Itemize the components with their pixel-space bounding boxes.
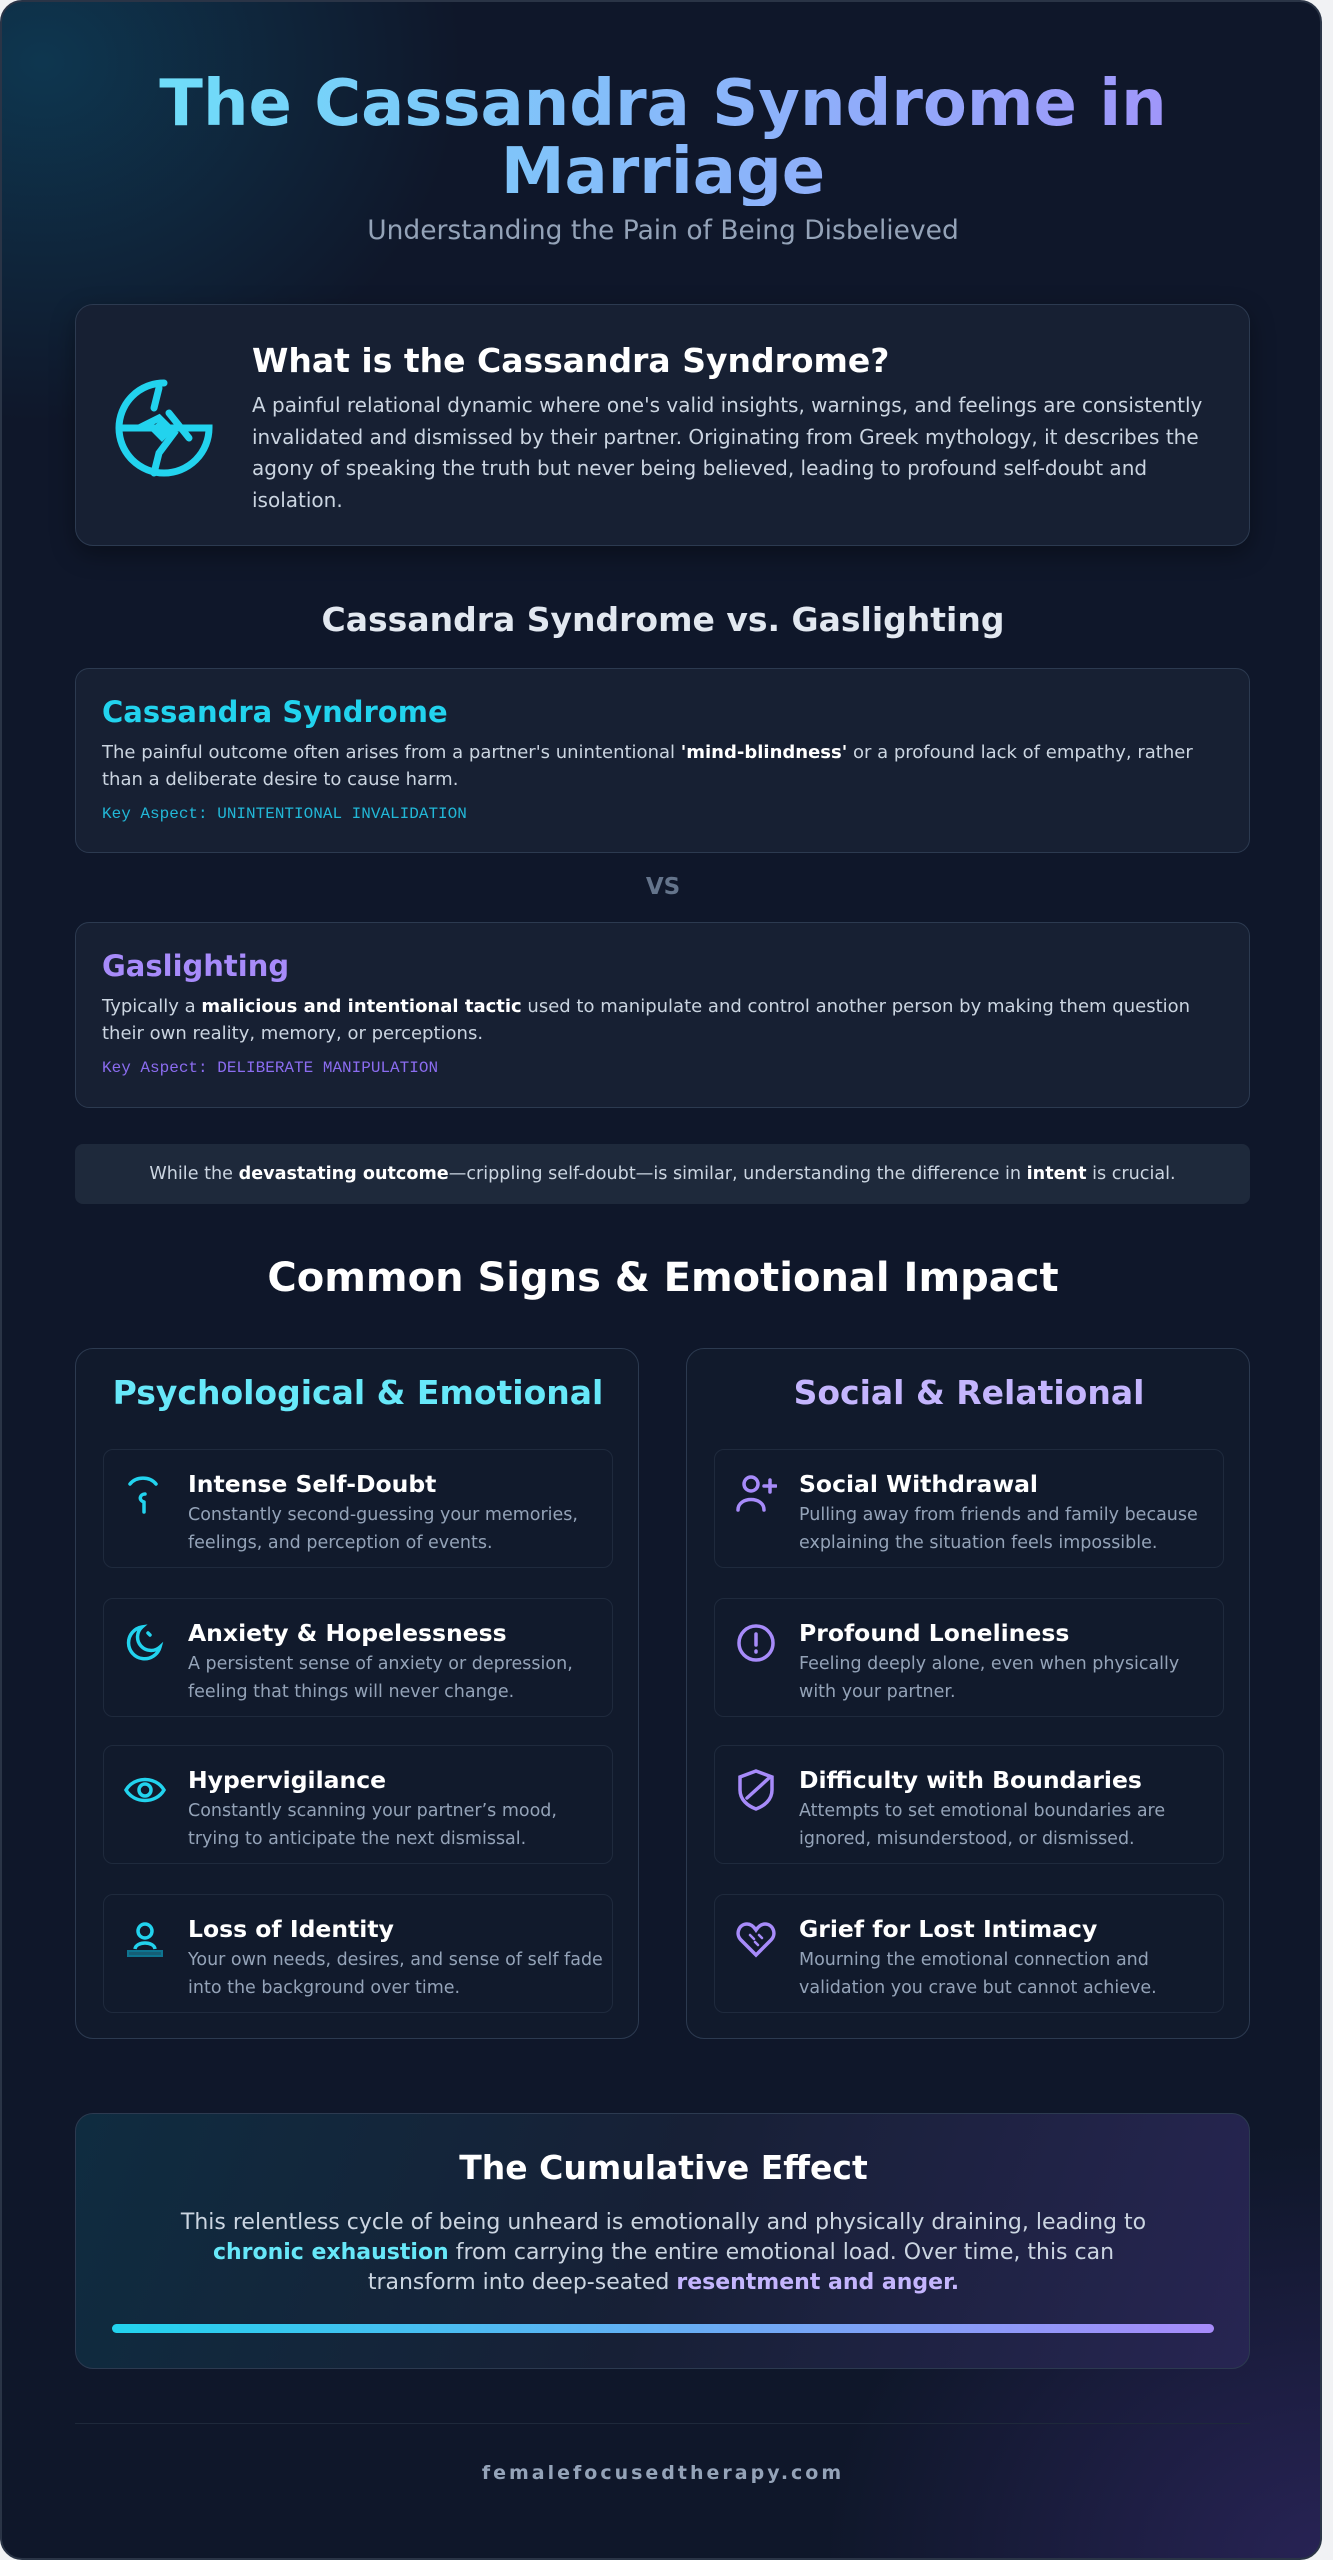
panel: cassandra: Cassandra Syndrome bbox=[102, 695, 448, 729]
item: anxiety bbox=[103, 1598, 613, 1717]
item: withdrawal: Social Withdrawal bbox=[799, 1470, 1038, 1498]
panel: social column bbox=[686, 1348, 1250, 2039]
panel: psychological column bbox=[75, 1348, 639, 2039]
title bbox=[2, 70, 1324, 206]
item: anxiety: A persistent sense of anxiety or depression, feeling that things will never change. bbox=[188, 1654, 573, 1702]
heading: signs: Common Signs & Emotional Impact bbox=[267, 1255, 1059, 1301]
item: grief bbox=[714, 1894, 1224, 2013]
panel: gaslighting: Gaslighting bbox=[102, 949, 289, 983]
item: hypervigilance: Hypervigilance bbox=[188, 1766, 386, 1794]
title: Marriage bbox=[501, 135, 825, 209]
body text: A painful relational dynamic where one's valid insights, warnings, and feelings are consistently invalidated and dismissed by their partner. Originating from Greek mythology, it describes the agony of speaking the truth but never being believed, leading to profound self-doubt and isolation. bbox=[252, 393, 1202, 512]
panel: gaslighting bbox=[75, 922, 1250, 1108]
item: withdrawal bbox=[714, 1449, 1224, 1568]
item: withdrawal: Pulling away from friends and family because explaining the situation feels impossible. bbox=[799, 1505, 1198, 1553]
item: loneliness: Feeling deeply alone, even when physically with your partner. bbox=[799, 1654, 1179, 1702]
item: loss of identity: Loss of Identity bbox=[188, 1915, 394, 1943]
item: self-doubt: Constantly second-guessing your memories, feelings, and perception of events. bbox=[188, 1505, 578, 1553]
footer: femalefocusedtherapy.com bbox=[482, 2462, 844, 2484]
panel: what is bbox=[75, 304, 1250, 546]
panel: cumulative effect bbox=[75, 2113, 1250, 2369]
item: hypervigilance: Constantly scanning your partner’s mood, trying to anticipate the next dismissal. bbox=[188, 1801, 557, 1849]
icon: eye symbol bbox=[116, 380, 212, 476]
item: loss of identity bbox=[103, 1894, 613, 2013]
column heading: Social & Relational bbox=[794, 1373, 1144, 1412]
title: The Cassandra Syndrome in bbox=[159, 67, 1167, 141]
item: loss of identity: Your own needs, desires, and sense of self fade into the background over time. bbox=[188, 1950, 603, 1998]
item: hypervigilance bbox=[103, 1745, 613, 1864]
vs label: VS bbox=[646, 874, 680, 900]
panel: gaslighting: Typically a malicious and intentional tactic used to manipulate and control another person by making them question their own reality, memory, or perceptions. bbox=[102, 996, 1190, 1044]
item: loneliness: Profound Loneliness bbox=[799, 1619, 1069, 1647]
heading: The Cumulative Effect bbox=[459, 2148, 868, 2187]
body text: This relentless cycle of being unheard is emotionally and physically draining, leading to chronic exhaustion from carrying the entire emotional load. Over time, this can transform into deep-seated resentment and anger. bbox=[181, 2210, 1146, 2295]
item: boundaries: Attempts to set emotional boundaries are ignored, misunderstood, or dismissed. bbox=[799, 1801, 1165, 1849]
gradient bar bbox=[112, 2324, 1214, 2333]
note bar bbox=[75, 1144, 1250, 1204]
item: boundaries bbox=[714, 1745, 1224, 1864]
panel: cassandra: The painful outcome often arises from a partner's unintentional 'mind-blindness' or a profound lack of empathy, rather than a deliberate desire to cause harm. bbox=[102, 742, 1193, 790]
item: self-doubt: Intense Self-Doubt bbox=[188, 1470, 436, 1498]
heading: What is the Cassandra Syndrome? bbox=[252, 341, 889, 380]
item: grief: Mourning the emotional connection and validation you crave but cannot achieve. bbox=[799, 1950, 1157, 1998]
item: loneliness bbox=[714, 1598, 1224, 1717]
item: grief: Grief for Lost Intimacy bbox=[799, 1915, 1097, 1943]
note bar: While the devastating outcome—crippling self-doubt—is similar, understanding the difference in intent is crucial. bbox=[149, 1164, 1176, 1184]
panel: gaslighting: Key Aspect: DELIBERATE MANIPULATION bbox=[102, 1059, 438, 1077]
column heading: Psychological & Emotional bbox=[113, 1373, 603, 1412]
heading: comparison: Cassandra Syndrome vs. Gaslighting bbox=[322, 600, 1004, 639]
item: self-doubt bbox=[103, 1449, 613, 1568]
panel: cassandra: Key Aspect: UNINTENTIONAL INVALIDATION bbox=[102, 805, 467, 823]
panel: cassandra bbox=[75, 668, 1250, 853]
item: boundaries: Difficulty with Boundaries bbox=[799, 1766, 1142, 1794]
subtitle: Understanding the Pain of Being Disbelieved bbox=[367, 215, 959, 246]
item: anxiety: Anxiety & Hopelessness bbox=[188, 1619, 507, 1647]
